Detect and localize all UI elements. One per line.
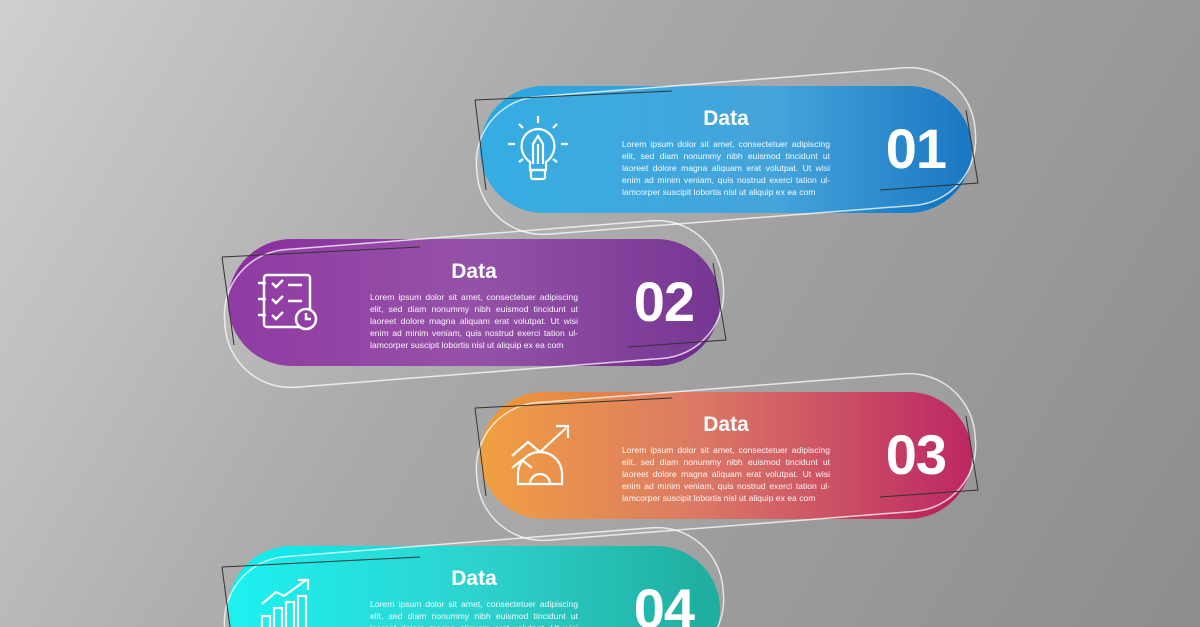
icon: lightbulb pencil — [508, 116, 568, 180]
glass: card 3 — [471, 369, 981, 545]
body text: lamcorper suscipit lobortis nisl ut aliquip ex ea com — [370, 340, 563, 350]
card 1 — [480, 86, 972, 213]
body text: laoreet dolore magna aliquam erat volutpat. Ut wisi — [622, 469, 830, 479]
heading: Data — [703, 107, 749, 130]
icon: checklist — [258, 274, 318, 330]
body text — [622, 139, 830, 197]
number: 01 — [886, 117, 946, 180]
body text: Lorem ipsum dolor sit amet, consectetuer adipiscing — [370, 292, 578, 302]
number: 02 — [634, 270, 694, 333]
body text: lamcorper suscipit lobortis nisl ut aliquip ex ea com — [622, 187, 815, 197]
card 3 — [480, 392, 972, 519]
body text: enim ad minim veniam, quis nostrud exerci tation ul- — [370, 328, 578, 338]
glass: card 4 — [219, 523, 729, 627]
body text: enim ad minim veniam, quis nostrud exerci tation ul- — [622, 175, 830, 185]
body text: elit, sed diam nonummy nibh euismod tincidunt ut — [622, 151, 830, 161]
body text: laoreet dolore magna aliquam erat volutpat. Ut wisi — [370, 316, 578, 326]
body text: enim ad minim veniam, quis nostrud exerci tation ul- — [622, 481, 830, 491]
body text — [370, 292, 578, 350]
icon: gear growth — [511, 424, 570, 486]
glass: card 2 — [219, 216, 729, 392]
card 4 — [228, 546, 720, 627]
heading: Data — [451, 567, 497, 590]
body text: lamcorper suscipit lobortis nisl ut aliquip ex ea com — [622, 493, 815, 503]
body text — [622, 445, 830, 503]
body text: Lorem ipsum dolor sit amet, consectetuer adipiscing — [622, 445, 830, 455]
body text — [370, 599, 578, 627]
heading: Data — [703, 413, 749, 436]
body text: laoreet dolore magna aliquam erat volutpat. Ut wisi — [622, 163, 830, 173]
body text: elit, sed diam nonummy nibh euismod tincidunt ut — [370, 611, 578, 621]
number: 03 — [886, 423, 946, 486]
body text: Lorem ipsum dolor sit amet, consectetuer adipiscing — [622, 139, 830, 149]
heading: Data — [451, 260, 497, 283]
body text: Lorem ipsum dolor sit amet, consectetuer adipiscing — [370, 599, 578, 609]
icon: bar chart growth — [260, 578, 310, 627]
glass: card 1 — [471, 63, 981, 239]
body text: elit, sed diam nonummy nibh euismod tincidunt ut — [622, 457, 830, 467]
card 2 — [228, 239, 720, 366]
body text: elit, sed diam nonummy nibh euismod tincidunt ut — [370, 304, 578, 314]
